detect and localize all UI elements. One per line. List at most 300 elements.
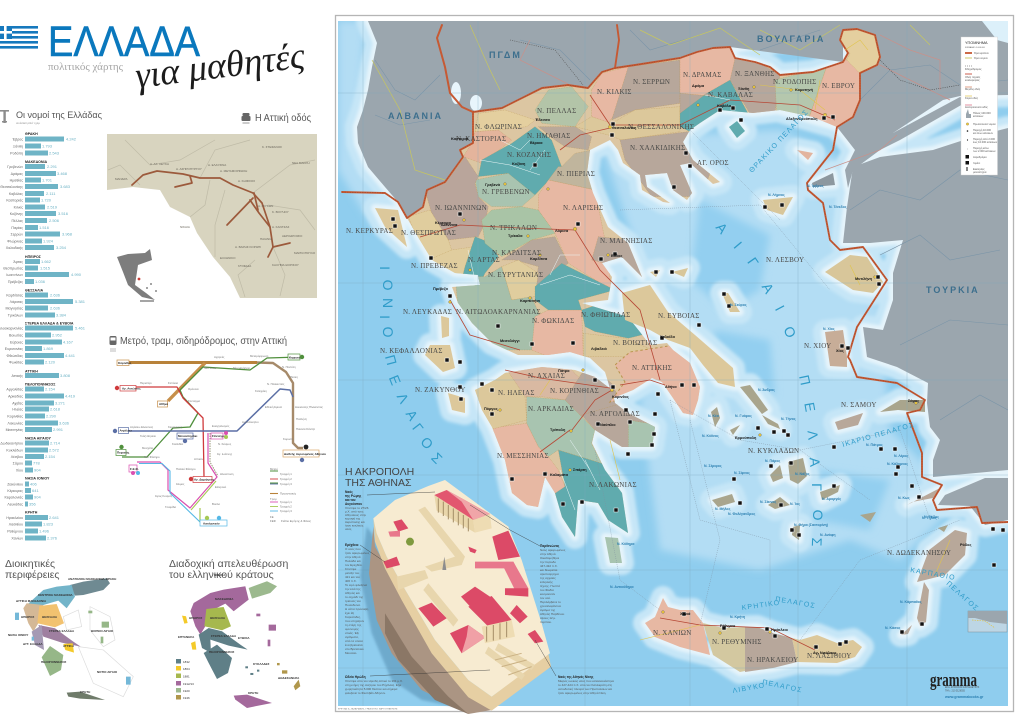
text: Temple of Roma: της Ρώμης bbox=[345, 494, 362, 498]
island names: Ν. Κάρπαθος bbox=[900, 600, 922, 604]
legend: Γραμμή 3 bbox=[280, 509, 292, 513]
group: Macedonia: Κοζάνης bbox=[10, 212, 23, 216]
capital names: Κέρκυρα bbox=[435, 221, 451, 225]
station names: Μεταμόρφωση bbox=[250, 354, 269, 358]
text: Erechtheion: ομώνυμης bbox=[345, 627, 359, 631]
text: Parthenon: την περίοδο bbox=[540, 560, 556, 564]
group: Macedonia: Γρεβενών bbox=[7, 165, 23, 169]
label: Ionian Sea: Ν bbox=[380, 298, 396, 308]
label: Aegean Sea: Γ bbox=[809, 483, 825, 491]
heading: nomes of Greece: Οι νομοί της Ελλάδας bbox=[16, 109, 102, 120]
text: Odeon of Herodes Atticus: Χτίστηκε από τον Ηρώδη Αττικό το 161 μ.Χ. bbox=[345, 679, 403, 683]
Parthenon bbox=[434, 490, 492, 533]
legend: Μετρό bbox=[270, 467, 278, 471]
capital names: Αγ. Νικόλαος bbox=[813, 651, 837, 655]
nome names: Ν. ΛΕΣΒΟΥ bbox=[766, 256, 804, 264]
Evia bbox=[622, 285, 735, 387]
interchange labels: ΝΙΚΑΙΑ bbox=[180, 225, 190, 229]
nome names: Ν. ΡΟΔΟΠΗΣ bbox=[773, 78, 816, 86]
label: other seas: ΘΡΑΚΙΚΟ ΠΕΛΑΓΟΣ bbox=[748, 109, 810, 174]
legend: Προαστιακός bbox=[280, 492, 297, 496]
island names: Ν. Χίος bbox=[823, 327, 835, 331]
nome names: Ν. ΕΥΒΟΙΑΣ bbox=[658, 312, 700, 320]
Evros bbox=[808, 60, 867, 132]
nome names: Ν. ΣΑΜΟΥ bbox=[841, 401, 877, 409]
text: Odeon of Herodes Atticus: φιλοξενεί το Φεστιβάλ Αθηνών. bbox=[345, 691, 386, 695]
group: Epirus: Θεσπρωτίας bbox=[3, 266, 23, 270]
station names: Καλλιθέα bbox=[172, 442, 184, 446]
Acropolis section: ΤΗΣ ΑΘΗΝΑΣ bbox=[345, 477, 412, 489]
Old Greece 1832 bbox=[199, 628, 248, 653]
group: Macedonia: ΜΑΚΕΔΟΝΙΑ bbox=[25, 160, 47, 164]
Black sea corner bbox=[982, 21, 1008, 43]
island names: Ν. Φολέγανδρος bbox=[728, 512, 755, 516]
Messinia bbox=[488, 423, 565, 513]
label: Aegean Sea: Α bbox=[713, 219, 732, 237]
group: Ionian islands: Λευκάδας bbox=[7, 502, 23, 506]
legend labels: και άνω κατοίκων bbox=[973, 131, 994, 135]
line number badges bbox=[113, 355, 308, 520]
label: Ionian Sea: Ε bbox=[386, 373, 404, 387]
text: Erechtheion: τρίαινας του bbox=[345, 599, 361, 603]
label: other seas: ΙΚΑΡΙΟ ΠΕΛΑΓΟΣ bbox=[842, 422, 915, 449]
group: Epirus: 4.990 bbox=[71, 272, 82, 277]
group: Epirus bbox=[3, 255, 82, 284]
text: Parthenon: 447-432 π.Χ. bbox=[540, 564, 558, 568]
group: Ionian islands: 406 bbox=[30, 482, 37, 486]
station names: Σύνταγμα bbox=[188, 399, 200, 403]
group: Central Greece and Evia: 1.869 bbox=[43, 346, 54, 351]
text: Erechtheion: Ο ναός που bbox=[345, 547, 361, 551]
group: Peloponnese: 2.618 bbox=[50, 406, 61, 412]
label: Aegean Sea: Π bbox=[796, 373, 814, 387]
group: Macedonia: Πέλλας bbox=[11, 219, 23, 223]
region names bbox=[178, 573, 300, 695]
label: Aegean Sea: Σ bbox=[809, 537, 825, 547]
terminal names: Αγ. Δημήτριος bbox=[194, 478, 215, 482]
text: Temple of Roma bbox=[345, 490, 369, 531]
group: Macedonia: 3.968 bbox=[62, 232, 73, 236]
legend: liberation years: 1881 bbox=[183, 674, 190, 678]
terrace walls bbox=[397, 507, 535, 680]
region names: ΗΠΕΙΡΟΣ bbox=[189, 616, 203, 620]
nome names: Ν. ΑΡΚΑΔΙΑΣ bbox=[528, 405, 574, 413]
station names: Ηλιούπολη bbox=[220, 472, 234, 476]
text: Erechtheion: στην Αθηνά bbox=[345, 555, 361, 559]
island names: Ν. Νάξος bbox=[795, 472, 810, 476]
Laconia bbox=[555, 450, 635, 543]
label: Ionian Sea: Α bbox=[403, 407, 422, 424]
interchange labels: ΓΛΥΦΑΔΑ bbox=[238, 264, 251, 268]
island names: Ν. Γυάρος bbox=[735, 414, 752, 418]
group: Epirus: Ιωαννίνων bbox=[6, 273, 23, 277]
illustration: Acropolis rock bbox=[360, 480, 551, 714]
text: Erechtheion: που στηρίζουν bbox=[345, 619, 365, 623]
rock bbox=[369, 527, 492, 714]
island names: Ν. Σίφνος bbox=[734, 471, 750, 475]
legend symbols bbox=[966, 109, 971, 171]
group: Thrace: 4.242 bbox=[66, 136, 77, 142]
label: Aegean Sea: Ι bbox=[772, 303, 788, 313]
publisher logo: ΕΚΔ. ΔΗΜΟΣΙΑΣ ΕΚΠΑΙΔΕΥΣΗΣ bbox=[945, 686, 980, 689]
terminal names: Μοναστηράκι bbox=[178, 434, 197, 438]
group: Thessaly: 2.636 bbox=[50, 292, 61, 298]
island names: Ν. Αμοργός bbox=[822, 497, 841, 501]
mainland Greece nomes bbox=[400, 20, 900, 550]
station names: Νέο Ηράκλειο bbox=[233, 366, 250, 370]
olive tree bbox=[406, 538, 414, 546]
label: Aegean Sea: Γ bbox=[744, 254, 762, 270]
region names: ΑΝΑΤΟΛΙΚΗ ΜΑΚΕΔΟΝΙΑ-ΘΡΑΚΗ bbox=[68, 577, 116, 581]
group: Thrace: Ροδόπη bbox=[10, 152, 23, 156]
legend labels: Όροι κρατών bbox=[973, 51, 990, 55]
group: Aegean islands: 778 bbox=[33, 460, 40, 466]
land bbox=[107, 134, 317, 298]
text: Temple of Athena Nike: νοτιοδυτική πλευρά των Προπυλαίων και bbox=[558, 687, 612, 691]
group: Macedonia: Κιλκίς bbox=[14, 206, 23, 210]
label: Aegean Sea: Α bbox=[807, 457, 823, 468]
nome names: Ν. ΛΑΣΙΘΙΟΥ bbox=[807, 652, 852, 660]
text: Parthenon: και θεωρείται bbox=[540, 568, 558, 572]
island names: Ν. Θήρα (Σαντορίνη) bbox=[794, 523, 828, 527]
Xanthi bbox=[730, 58, 780, 117]
text: Temple of Athena Nike: Μικρός ιωνικός ναός που κατασκευάστηκε bbox=[558, 679, 615, 683]
label: Ionian Sea: Γ bbox=[409, 420, 427, 436]
Attiki Odos road bbox=[132, 171, 290, 257]
nome names: Ν. ΙΩΑΝΝΙΝΩΝ bbox=[435, 204, 487, 212]
legend: Τραμ bbox=[270, 497, 277, 501]
group: Crete: Ηρακλείου bbox=[6, 516, 23, 520]
station names: Βούλα bbox=[212, 502, 220, 506]
heading: Attiki Odos: Η Αττική οδός bbox=[255, 112, 311, 124]
region names: ΗΠΕΙΡΟΣ bbox=[21, 615, 35, 619]
ferry routes bbox=[595, 130, 960, 640]
group: Attica bbox=[11, 370, 71, 378]
nome names: Ν. ΑΡΓΟΛΙΔΑΣ bbox=[590, 410, 640, 418]
Ileia bbox=[468, 367, 527, 433]
region names: ΚΡΗΤΗ bbox=[248, 691, 258, 695]
group: Thrace: Ξάνθη bbox=[13, 144, 23, 148]
region names: ΘΡΑΚΗ bbox=[214, 573, 225, 577]
group: Aegean islands: 2.154 bbox=[45, 454, 56, 459]
group: Central Greece and Evia: Βοιωτίας bbox=[9, 334, 23, 338]
terminal names: Κόρινθος bbox=[118, 361, 132, 365]
group: Macedonia: 1.701 bbox=[42, 178, 53, 182]
Viotia bbox=[583, 333, 650, 357]
group: Crete: 2.641 bbox=[49, 515, 60, 520]
label: other seas: ΠΕΛΑΓΟΣ bbox=[945, 580, 980, 613]
neighbouring country names: ΠΓΔΜ bbox=[489, 50, 522, 60]
legend labels: των 2.000 κατοίκων bbox=[973, 149, 996, 153]
Kavala bbox=[680, 80, 752, 133]
text: Erechtheion: τη στέγη της bbox=[345, 623, 362, 627]
legend labels: έως 10.000 κατοίκων bbox=[973, 140, 998, 144]
Fthiotida bbox=[535, 263, 615, 310]
station names: Εθνική Άμυνα bbox=[265, 405, 282, 409]
interchange labels: Κ. ΒΟΥΛΙΟΥ bbox=[272, 210, 289, 214]
Imbros island bbox=[812, 173, 835, 187]
nome names: Ν. ΡΕΘΥΜΝΗΣ bbox=[712, 638, 762, 646]
interchange labels: ΜΑΝΔΡΑ bbox=[115, 177, 127, 181]
nome names: Ν. ΦΘΙΩΤΙΔΑΣ bbox=[581, 311, 630, 319]
capital names bbox=[433, 84, 971, 655]
group: Macedonia: Σερρών bbox=[10, 232, 23, 236]
island names: Ν. Μήλος bbox=[715, 507, 731, 511]
Aegean and Dodecanese islands bbox=[256, 614, 276, 646]
group: Peloponnese: 3.636 bbox=[59, 420, 70, 426]
legend labels: Περιοχή κάτω bbox=[973, 146, 989, 150]
group: Macedonia: 1.516 bbox=[39, 225, 50, 230]
Serres side bbox=[680, 93, 717, 113]
icon: car bbox=[242, 113, 250, 124]
interchange labels bbox=[115, 145, 316, 268]
group: Thessaly: 2.636 bbox=[50, 306, 61, 310]
station names: Γλυφάδα bbox=[165, 505, 176, 509]
interchange labels: ΚΑΛΥΒΙΑ ΘΟΡΙΚΟΥ bbox=[272, 263, 299, 267]
nome names: ΑΓ. ΟΡΟΣ bbox=[697, 159, 729, 167]
group: Macedonia: 3.683 bbox=[60, 184, 71, 189]
nome names: Ν. ΛΕΥΚΑΔΑΣ bbox=[403, 308, 452, 316]
text: Temple of Roma: και του bbox=[345, 498, 356, 502]
group: Thessaly: Τρικάλων bbox=[8, 314, 23, 318]
Argolis bbox=[582, 403, 668, 453]
terminal names: Σύνταγμα bbox=[212, 434, 226, 438]
label: Ionian Sea: Ο bbox=[417, 434, 437, 452]
interchange labels: Α. ΒΑΡΗΣ ΚΟΡΩΠΙ bbox=[235, 245, 261, 249]
publisher logo: gramma bbox=[930, 671, 977, 691]
neighbouring country names: ΒΟΥΛΓΑΡΙΑ bbox=[757, 34, 825, 44]
group: Central Greece and Evia: 5.461 bbox=[75, 326, 86, 330]
nome names: Ν. ΕΒΡΟΥ bbox=[822, 82, 855, 90]
group: Crete: 2.376 bbox=[47, 536, 58, 540]
legend labels: Μεγάλη οδός bbox=[965, 87, 981, 91]
icon: Greek flag bbox=[0, 26, 38, 49]
coastal shelf bbox=[357, 21, 1008, 672]
text: Erechtheion: μεταξύ του bbox=[345, 571, 360, 575]
group: Thessaly: Λάρισας bbox=[10, 300, 23, 304]
heading: nomes of Greece bbox=[0, 109, 102, 125]
Achaia bbox=[505, 363, 582, 400]
Macedonia and Epirus bbox=[190, 586, 249, 635]
text: Parthenon: κοσμούσαν bbox=[540, 592, 556, 596]
text: Parthenon: Περιλάμβανε το bbox=[540, 600, 561, 604]
station names: Πεύκη bbox=[290, 375, 298, 379]
text: Temple of Roma: Ναός bbox=[345, 490, 353, 494]
nome names: Ν. ΠΙΕΡΙΑΣ bbox=[557, 170, 595, 178]
text: Parthenon: χρυσελεφάντινο bbox=[540, 604, 561, 608]
text: Parthenon: Αθηνάς Παρθένου bbox=[540, 612, 565, 616]
publisher logo: www.grammabooks.gr bbox=[944, 695, 984, 699]
island names: Ν. Σκύρος bbox=[730, 303, 747, 307]
group: Macedonia: Δράμας bbox=[11, 172, 23, 176]
capital names: Τρίκαλα bbox=[508, 234, 523, 238]
group: Macedonia: Χαλκιδικής bbox=[6, 246, 23, 250]
interchange labels: Α. ΚΑΝΤΖΑΣ bbox=[272, 225, 290, 229]
group: Aegean islands: Δωδεκανήσου bbox=[0, 442, 23, 446]
terminal names: Διεθνής Αερολιμένας Αθηνών bbox=[284, 452, 326, 456]
airport and port icons bbox=[391, 106, 1005, 649]
group: Aegean islands: ΝΗΣΙΑ ΑΙΓΑΙΟΥ bbox=[25, 436, 51, 440]
station names: Άλιμος bbox=[176, 482, 185, 486]
diagram: Athens rail network bbox=[113, 354, 326, 526]
legend: liberation years: 1912/13 bbox=[183, 682, 194, 686]
island names bbox=[610, 184, 939, 630]
neighbouring country names: ΑΛΒΑΝΙΑ bbox=[388, 111, 443, 121]
island names: Ν. Σέριφος bbox=[704, 464, 722, 468]
text: Parthenon: της αρχαίας bbox=[540, 576, 556, 580]
nome names: Ν. ΕΥΡΥΤΑΝΙΑΣ bbox=[488, 271, 543, 279]
callout lines bbox=[360, 492, 556, 676]
station names: Αμπελόκηποι bbox=[242, 420, 259, 424]
text: Erechtheion: το σημάδι της bbox=[345, 595, 364, 599]
station names: Δουκίσσης Πλακεντίας bbox=[295, 405, 323, 409]
island names: Ν. Κάλυμνος bbox=[887, 462, 908, 466]
Central Greece bbox=[38, 625, 81, 647]
capital names: Θεσσαλονίκη bbox=[612, 126, 637, 130]
sea patches bbox=[338, 21, 960, 570]
island names: Ν. Ίος bbox=[790, 502, 800, 506]
group: Peloponnese: Μεσσηνίας bbox=[6, 428, 23, 432]
legend: Γραμμή 1 bbox=[280, 500, 292, 504]
icon: train bbox=[110, 336, 116, 352]
interchange labels: Α. ΑΣΠΡΟΠΥΡΓΟΥ bbox=[176, 167, 202, 171]
island names: Ν. Λήμνος bbox=[768, 193, 785, 197]
Arcadia bbox=[527, 397, 602, 463]
text: Erechtheion: Ερέχθειο bbox=[345, 543, 358, 547]
Kilkis bbox=[592, 67, 628, 123]
group: Macedonia: Ημαθίας bbox=[10, 178, 23, 182]
nome names: Ν. ΚΑΣΤΟΡΙΑΣ bbox=[456, 135, 506, 143]
nome names: Ν. ΧΑΝΙΩΝ bbox=[653, 629, 692, 637]
text: Temple of Athena Nike: Ναός της Αθηνάς Νίκης bbox=[558, 675, 594, 679]
nome names: Ν. ΚΥΚΛΑΔΩΝ bbox=[748, 447, 799, 455]
Crete: Rethymno bbox=[703, 623, 745, 672]
group: Thrace: ΘΡΑΚΗ bbox=[25, 132, 38, 136]
shadow bbox=[360, 527, 455, 707]
Thasos bbox=[729, 121, 745, 138]
Crete bbox=[234, 695, 272, 708]
plateau wall bbox=[373, 518, 551, 711]
capital names: Χανιά bbox=[680, 612, 691, 616]
region names: ΘΕΣΣΑΛΙΑ bbox=[42, 615, 58, 619]
capital names: Κοζάνη bbox=[512, 162, 526, 166]
group: Central Greece and Evia: 4.441 bbox=[65, 353, 76, 358]
islands bbox=[88, 611, 109, 643]
legend: liberation years: 1864 bbox=[183, 667, 190, 671]
label: other seas: ΚΑΡΠΑΘΙΟ bbox=[910, 567, 956, 582]
group: Peloponnese: 4.419 bbox=[65, 394, 76, 398]
island names: Ν. Σίκινος bbox=[760, 500, 777, 504]
minor roads bbox=[108, 140, 315, 297]
capital names: Βόλος bbox=[611, 254, 622, 258]
Thessaly bbox=[37, 604, 64, 627]
text: Erechtheion: τον Ερεχθέα. bbox=[345, 563, 363, 567]
text: Temple of Roma: Αυγούστου bbox=[345, 502, 362, 506]
interchange labels: Κ. ΣΤΕΦΑΝΟΣ bbox=[262, 145, 282, 149]
Imathia bbox=[538, 127, 592, 150]
lines bbox=[122, 357, 303, 522]
legend panel bbox=[961, 37, 998, 175]
station names: Αιγάλεω Ελαιώνας bbox=[130, 425, 154, 429]
neighbouring country names: ΤΟΥΡΚΙΑ bbox=[926, 285, 980, 295]
interchange labels: ΜΑΡΚΟΠΟΥΛΟ bbox=[294, 251, 316, 255]
group: Thrace: 2.543 bbox=[49, 150, 60, 156]
region names: ΑΤΤΙΚΗ bbox=[63, 644, 74, 648]
station names: Γκάζι Θησείο bbox=[140, 434, 156, 438]
text: Parthenon: του Φειδία bbox=[540, 588, 554, 592]
border of Greece bbox=[342, 25, 1008, 523]
text: Erechtheion: Κτίστηκε bbox=[345, 567, 357, 571]
legend: Γραμμή 3 bbox=[280, 482, 292, 486]
text: Parthenon: ύψους 12 μ. bbox=[540, 616, 556, 620]
nome names: Ν. ΤΡΙΚΑΛΩΝ bbox=[490, 224, 537, 232]
legend labels bbox=[965, 51, 998, 174]
nome names: Ν. ΑΤΤΙΚΗΣ bbox=[632, 364, 672, 372]
station names: Σεπόλια bbox=[168, 381, 178, 385]
Thessaloniki bbox=[575, 107, 680, 140]
capital names: Λάρισα bbox=[555, 229, 569, 233]
Thrace bbox=[249, 581, 277, 599]
station names: Κορωπί bbox=[283, 437, 293, 441]
legend labels: Όροι νομών bbox=[973, 56, 988, 60]
capital names: Πύργος bbox=[484, 407, 498, 411]
group: Peloponnese: ΠΕΛΟΠΟΝΝΗΣΟΣ bbox=[25, 382, 56, 386]
station names: Αχαρνές bbox=[214, 355, 225, 359]
group: Ionian islands: 356 bbox=[29, 502, 36, 506]
group: Attica: Αττικής bbox=[11, 374, 23, 378]
interchange labels: Α. ΑΧ. ΛΕΥΚΑ bbox=[150, 162, 169, 166]
heading: metro, tram, rail bbox=[110, 335, 287, 352]
graticule bbox=[338, 21, 1008, 706]
station names: Παλλήνη bbox=[296, 417, 307, 421]
Larissa bbox=[538, 180, 612, 290]
nome names: Ν. ΣΕΡΡΩΝ bbox=[633, 78, 670, 86]
region names: ΔΥΤ. ΕΛΛΑΔΑ bbox=[23, 642, 43, 646]
Pella bbox=[535, 87, 588, 127]
capital names: Χίος bbox=[836, 349, 844, 353]
group: Crete: 1.496 bbox=[39, 528, 50, 534]
Pieria bbox=[548, 150, 595, 190]
capital names: Ηράκλειο bbox=[771, 628, 789, 632]
group: Peloponnese: Αχαΐας bbox=[12, 402, 23, 406]
header: flag and title bbox=[0, 18, 308, 97]
heading: successive liberation: του ελληνικού κράτους bbox=[169, 569, 274, 581]
island names: Ν. Ίμβρος bbox=[807, 184, 824, 188]
legend labels: Αεροδρόμιο bbox=[973, 155, 987, 159]
group: Epirus: 1.662 bbox=[41, 259, 52, 264]
label: Aegean Sea: Ο bbox=[780, 324, 800, 340]
group: Macedonia: 2.111 bbox=[46, 191, 56, 196]
legend labels: κατοίκων bbox=[973, 114, 984, 118]
nome names: Ν. ΚΑΒΑΛΑΣ bbox=[708, 91, 753, 99]
group: Aegean islands: Κυκλάδων bbox=[6, 448, 23, 452]
legend: ΣΕΦ bbox=[270, 519, 277, 523]
group: Macedonia: Φλώρινας bbox=[7, 240, 23, 244]
station names: Άγιος Κοσμάς bbox=[155, 494, 173, 498]
nome names: Ν. ΛΑΡΙΣΗΣ bbox=[563, 204, 603, 212]
Karditsa bbox=[502, 237, 568, 287]
capital names: Ναύπλιο bbox=[600, 423, 616, 427]
text: Erechtheion: Μουσείο. bbox=[345, 651, 357, 655]
nome names: Ν. ΚΕΡΚΥΡΑΣ bbox=[346, 227, 393, 235]
region names: ΚΥΚΛΑΔΕΣ bbox=[253, 662, 270, 666]
nome names: Ν. ΠΡΕΒΕΖΑΣ bbox=[411, 262, 458, 270]
nome names: Ν. ΓΡΕΒΕΝΩΝ bbox=[482, 188, 530, 196]
Western Greece bbox=[32, 625, 44, 650]
Athena statue bbox=[442, 557, 446, 570]
terminal names: Ασκληπιείο bbox=[203, 522, 220, 526]
text: Temple of Roma: Χτίστηκε το 27/26 bbox=[345, 506, 369, 510]
